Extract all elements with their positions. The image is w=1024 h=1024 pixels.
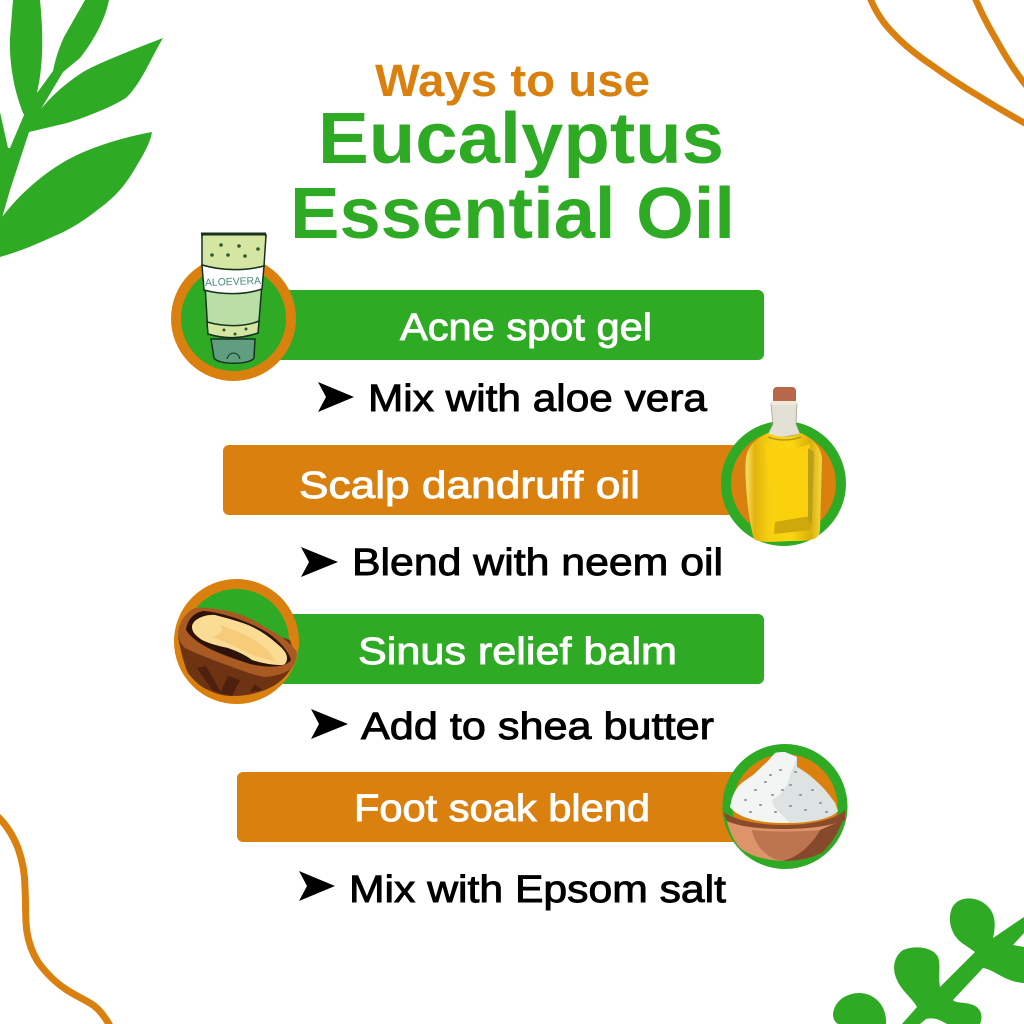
icon ring — [728, 749, 842, 864]
decoration: top-left eucalyptus leaves — [0, 0, 163, 257]
title line: Essential Oil: Essential Oil — [290, 174, 735, 254]
sub text: Blend with neem oil: Blend with neem oil — [352, 542, 723, 584]
title line: Eucalyptus: Eucalyptus — [318, 99, 724, 179]
banner bar — [270, 614, 764, 684]
banner bar — [223, 445, 760, 515]
arrow — [299, 871, 335, 901]
banner bar — [260, 290, 764, 360]
icon ring — [179, 584, 294, 699]
banner bar — [237, 772, 760, 842]
icon: bowl of epsom salt — [723, 752, 845, 861]
icon: shea butter shell — [178, 608, 297, 696]
sub text: Mix with aloe vera: Mix with aloe vera — [368, 378, 708, 420]
arrow — [318, 382, 354, 412]
banner label: Scalp dandruff oil — [299, 465, 640, 507]
panel: scalp dandruff oil — [223, 387, 841, 542]
arrow — [301, 547, 338, 577]
panel: acne spot gel — [176, 234, 764, 376]
icon ring — [176, 261, 291, 376]
icon: oil bottle — [745, 387, 822, 542]
decoration: bottom-left orange curve — [0, 816, 110, 1024]
panel: sinus relief balm — [178, 584, 764, 699]
title — [290, 55, 735, 254]
sub text: Mix with Epsom salt: Mix with Epsom salt — [349, 869, 726, 911]
icon: aloe vera tube — [201, 234, 266, 363]
sub text: Add to shea butter: Add to shea butter — [361, 706, 714, 748]
tube label: ALOEVERA — [205, 275, 261, 289]
banner label: Foot soak blend — [354, 788, 650, 830]
banner label: Acne spot gel — [400, 307, 652, 349]
decoration: bottom-right sprig — [833, 898, 1024, 1024]
decoration: top-right orange curves — [870, 0, 1024, 125]
panel: foot soak blend — [237, 749, 845, 864]
title line: Ways to use: Ways to use — [375, 55, 650, 106]
icon ring — [726, 426, 841, 541]
banner label: Sinus relief balm — [358, 631, 677, 673]
tube dots — [210, 243, 260, 336]
arrow — [311, 709, 348, 739]
